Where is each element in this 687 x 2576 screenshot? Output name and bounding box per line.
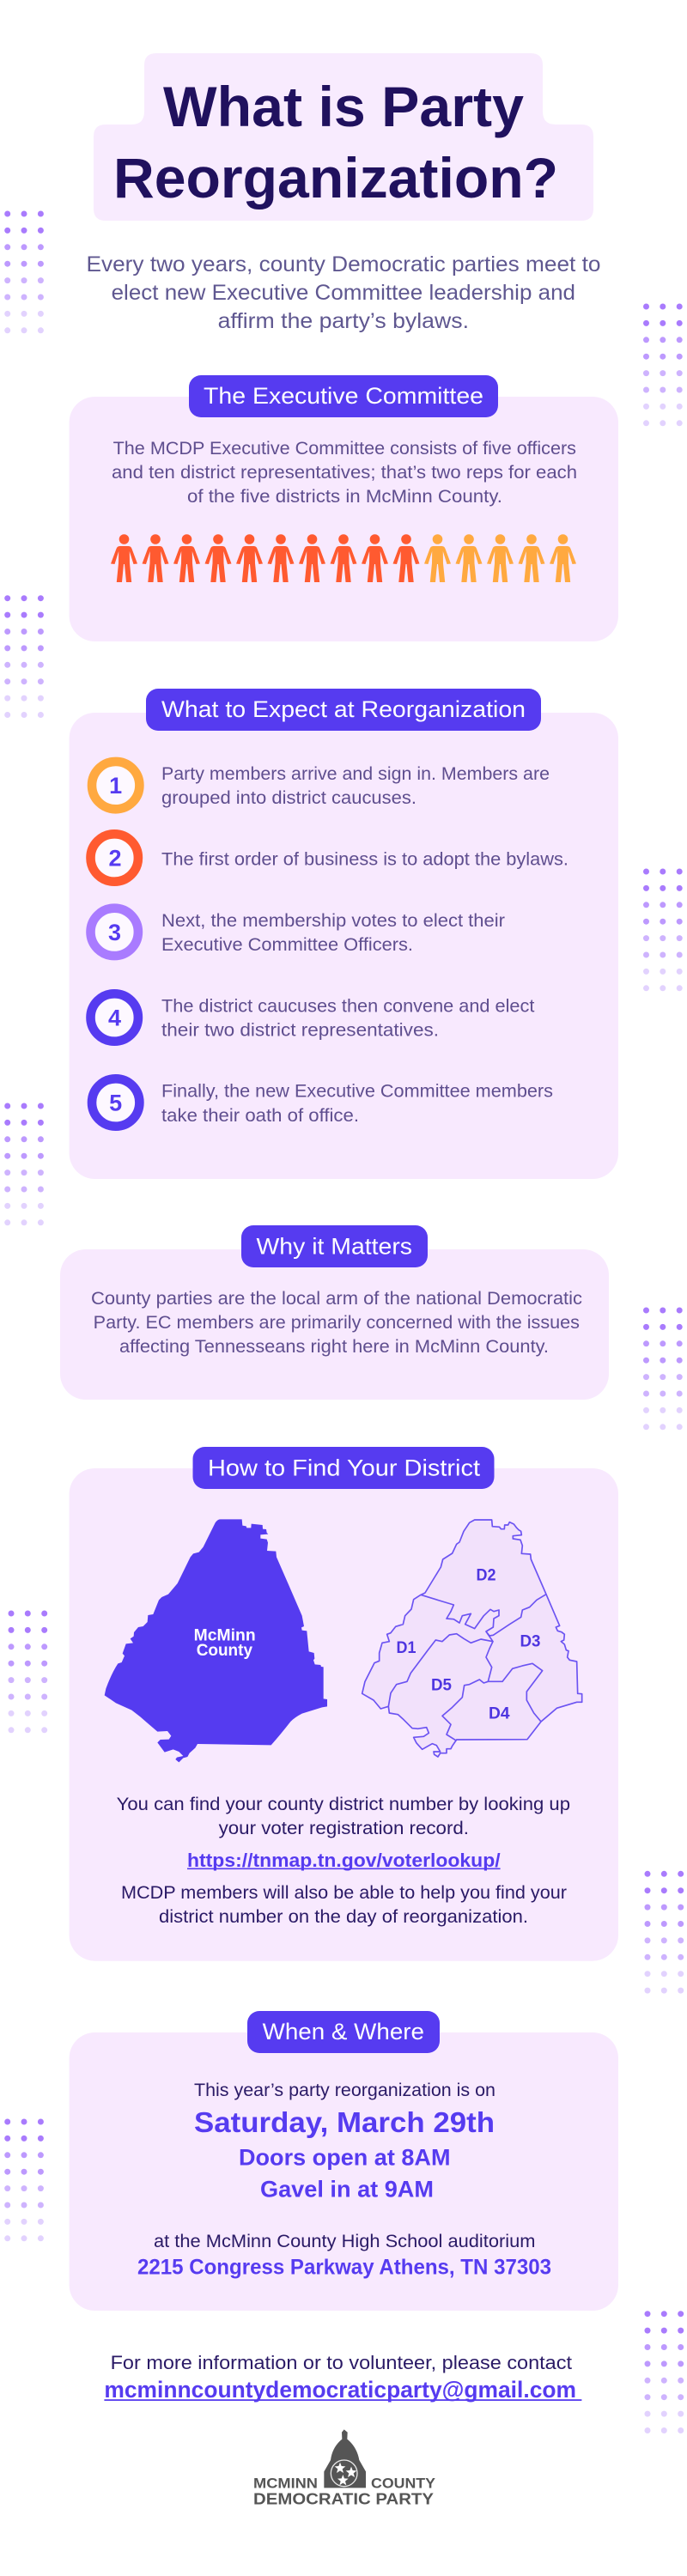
step 5: Finally, the new Executive Committee members [161,1081,553,1102]
heading: why it matters: Why it Matters [256,1234,412,1260]
step 1 [92,762,550,809]
map: county districts D1 to D5: D3 [520,1632,541,1651]
panel: when and where [70,2011,618,2311]
intro text [86,252,601,333]
heading: how to find your district [192,1447,495,1489]
text: members can help: district number on the day of reorganization. [159,1906,528,1927]
step 2: 2 [108,845,122,871]
step 3: 3 [108,920,121,945]
text: how to look up district: your voter registration record. [219,1818,469,1838]
decorative dots: left 1 [4,211,44,333]
heading: the executive committee: The Executive Committee [204,383,483,409]
decorative dots: left 4 [9,1611,47,1733]
map: county districts D1 to D5: D2 [476,1566,496,1585]
logo: McMinn County Democratic Party: COUNTY [371,2476,436,2492]
text: why it matters: affecting Tennesseans right here in McMinn County. [119,1336,549,1357]
step 4 [91,993,534,1042]
step 5 [92,1078,553,1127]
panel: how to find your district [70,1447,618,1961]
text: committee description: of the five districts in McMinn County. [187,486,502,507]
map: county districts D1 to D5: D4 [489,1704,510,1723]
decorative dots: right 3 [643,1307,683,1430]
step 1: 1 [109,773,122,799]
link: voter lookup: https://tnmap.tn.gov/voterlookup/ [187,1850,501,1871]
intro text: affirm the party’s bylaws. [218,309,469,333]
panel: what to expect [70,689,618,1179]
title: Reorganization? [113,146,558,210]
text: how to look up district: You can find your county district number by looking up [117,1794,570,1814]
text: venue: at the McMinn County High School auditorium [154,2231,536,2251]
intro text: elect new Executive Committee leadership and [112,281,575,305]
map: county districts D1 to D5: D5 [431,1676,452,1695]
text: why it matters [91,1288,582,1357]
link: contact email: mcminncountydemocraticparty@gmail.com [104,2377,576,2403]
text: members can help [121,1882,567,1927]
step 4: The district caucuses then convene and elect [161,996,534,1017]
decorative dots: right 2 [643,869,683,991]
text: address: 2215 Congress Parkway Athens, TN 37303 [137,2257,551,2280]
heading: the executive committee [189,375,498,417]
step 1: Party members arrive and sign in. Members are [161,763,550,784]
step 5: 5 [109,1091,122,1116]
decorative dots: right 1 [643,304,683,426]
decorative dots: left 3 [4,1103,44,1225]
map: McMinn County silhouette: County [197,1642,252,1660]
step 4: 4 [108,1005,121,1030]
text: gavel in: Gavel in at 9AM [260,2177,434,2202]
step 2: The first order of business is to adopt the bylaws. [161,849,568,870]
step 1: grouped into district caucuses. [161,787,416,808]
heading: when and where: When & Where [263,2019,424,2044]
intro text: Every two years, county Democratic parties meet to [86,252,601,276]
decorative dots: right 5 [644,2311,684,2433]
text: why it matters: County parties are the local arm of the national Democratic [91,1288,582,1309]
text: why it matters: Party. EC members are primarily concerned with the issues [94,1312,580,1333]
heading: what to expect: What to Expect at Reorganization [161,696,526,722]
heading: what to expect [146,689,541,731]
text: committee description: and ten district representatives; that’s two reps for each [112,462,577,483]
title [94,53,593,221]
heading: when and where [247,2011,440,2053]
logo: McMinn County Democratic Party: DEMOCRATIC PARTY [253,2490,435,2508]
title: What is Party [163,75,524,138]
text: doors open: Doors open at 8AM [239,2145,450,2171]
logo: McMinn County Democratic Party [253,2429,436,2508]
map: county districts D1 to D5 [362,1520,582,1757]
step 4: their two district representatives. [161,1020,439,1041]
map: county districts D1 to D5: D1 [397,1638,416,1657]
text: members can help: MCDP members will also be able to help you find your [121,1882,567,1903]
step 3 [91,908,505,956]
step 2 [91,834,568,882]
icon: capitol dome with three stars [324,2429,366,2488]
step 3: Next, the membership votes to elect their [161,910,505,931]
heading: why it matters [241,1225,428,1267]
panel: why it matters [60,1225,609,1400]
text: how to look up district [117,1794,570,1838]
decorative dots: right 4 [644,1871,684,1994]
panel: the executive committee [70,375,618,641]
heading: how to find your district: How to Find Your District [208,1455,481,1481]
step 5: take their oath of office. [161,1105,359,1126]
text: event intro: This year’s party reorganization is on [194,2080,495,2100]
map: McMinn County silhouette [105,1519,327,1762]
text: committee description: The MCDP Executive Committee consists of five officers [113,438,576,459]
step 3: Executive Committee Officers. [161,934,413,955]
text: contact prompt: For more information or to volunteer, please contact [111,2352,573,2373]
text: event date: Saturday, March 29th [194,2106,495,2138]
decorative dots: left 5 [4,2119,44,2241]
logo: McMinn County Democratic Party: MCMINN [253,2476,318,2492]
map: McMinn County silhouette: McMinn [194,1627,256,1645]
text: committee description [112,438,577,507]
icons: fifteen committee members [111,534,576,582]
decorative dots: left 2 [4,595,44,718]
